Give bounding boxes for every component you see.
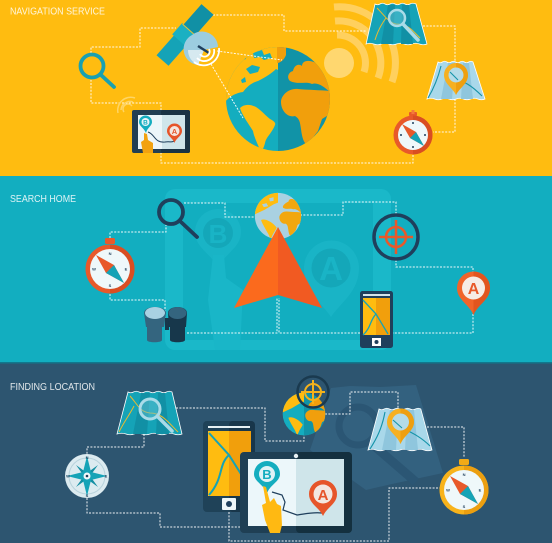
icon: compass rose: N — [86, 455, 89, 460]
icon: magnifier — [80, 54, 114, 87]
icon: compass: N — [463, 472, 466, 477]
icon: faint wifi — [118, 97, 135, 113]
icon: compass rose — [65, 454, 109, 498]
icon: pin A: A — [468, 281, 480, 298]
icon: compass: N — [109, 251, 112, 256]
icon: globe — [282, 392, 326, 436]
icon: tablet with route — [132, 110, 190, 153]
icon: compass: E — [125, 266, 128, 272]
icon: tablet with route: B — [143, 120, 148, 126]
icon: compass rose: S — [86, 493, 89, 498]
icon: compass: S — [463, 504, 466, 509]
icon: crosshair — [374, 215, 418, 259]
panel: search home — [10, 189, 490, 350]
background: faint tablet — [165, 189, 391, 350]
icon: compass rose: E — [105, 474, 108, 478]
heading: finding location: FINDING LOCATION — [10, 381, 95, 393]
icon: map with magnifier — [117, 391, 182, 435]
icon: tablet with route: A — [172, 127, 178, 136]
icon: compass: W — [446, 488, 450, 492]
icon: compass: E — [479, 488, 482, 492]
icon: globe — [254, 192, 302, 238]
icon: globe — [226, 47, 330, 151]
icon: tablet with route: B — [262, 467, 272, 482]
connector lines — [87, 392, 464, 541]
icon: navigation arrow — [234, 227, 322, 308]
icon: binoculars — [144, 307, 187, 342]
panel: finding location — [0, 362, 552, 543]
icon: compass — [440, 459, 488, 514]
icon: compass: W — [92, 266, 96, 272]
heading: search home: SEARCH HOME — [10, 193, 76, 205]
icon: pin A — [457, 272, 490, 315]
connector lines over globe — [211, 51, 282, 118]
background: faint tablet: B — [209, 219, 227, 249]
icon: satellite — [155, 3, 219, 67]
icon: smartphone — [203, 421, 255, 512]
panel: navigation service — [0, 0, 552, 176]
icon: compass rose: W — [66, 474, 70, 478]
icon: map with pin — [368, 408, 432, 451]
icon: magnifier — [159, 200, 197, 237]
icon: map with magnifier — [366, 3, 427, 45]
icon: compass — [394, 110, 432, 154]
background: faint map magnifier — [310, 385, 443, 490]
connector lines — [110, 202, 473, 333]
icon: compass — [86, 238, 134, 294]
icon: tablet with route — [240, 452, 352, 533]
icon: tablet with route: A — [318, 487, 329, 504]
background: faint tablet: A — [319, 250, 343, 287]
heading: navigation service: NAVIGATION SERVICE — [10, 6, 105, 18]
icon: wifi signal — [324, 7, 395, 82]
icon: map with pin — [427, 61, 485, 100]
icon: crosshair — [298, 376, 328, 408]
connector lines — [91, 15, 455, 163]
icon: compass: S — [109, 283, 112, 288]
icon: smartphone — [360, 291, 393, 348]
